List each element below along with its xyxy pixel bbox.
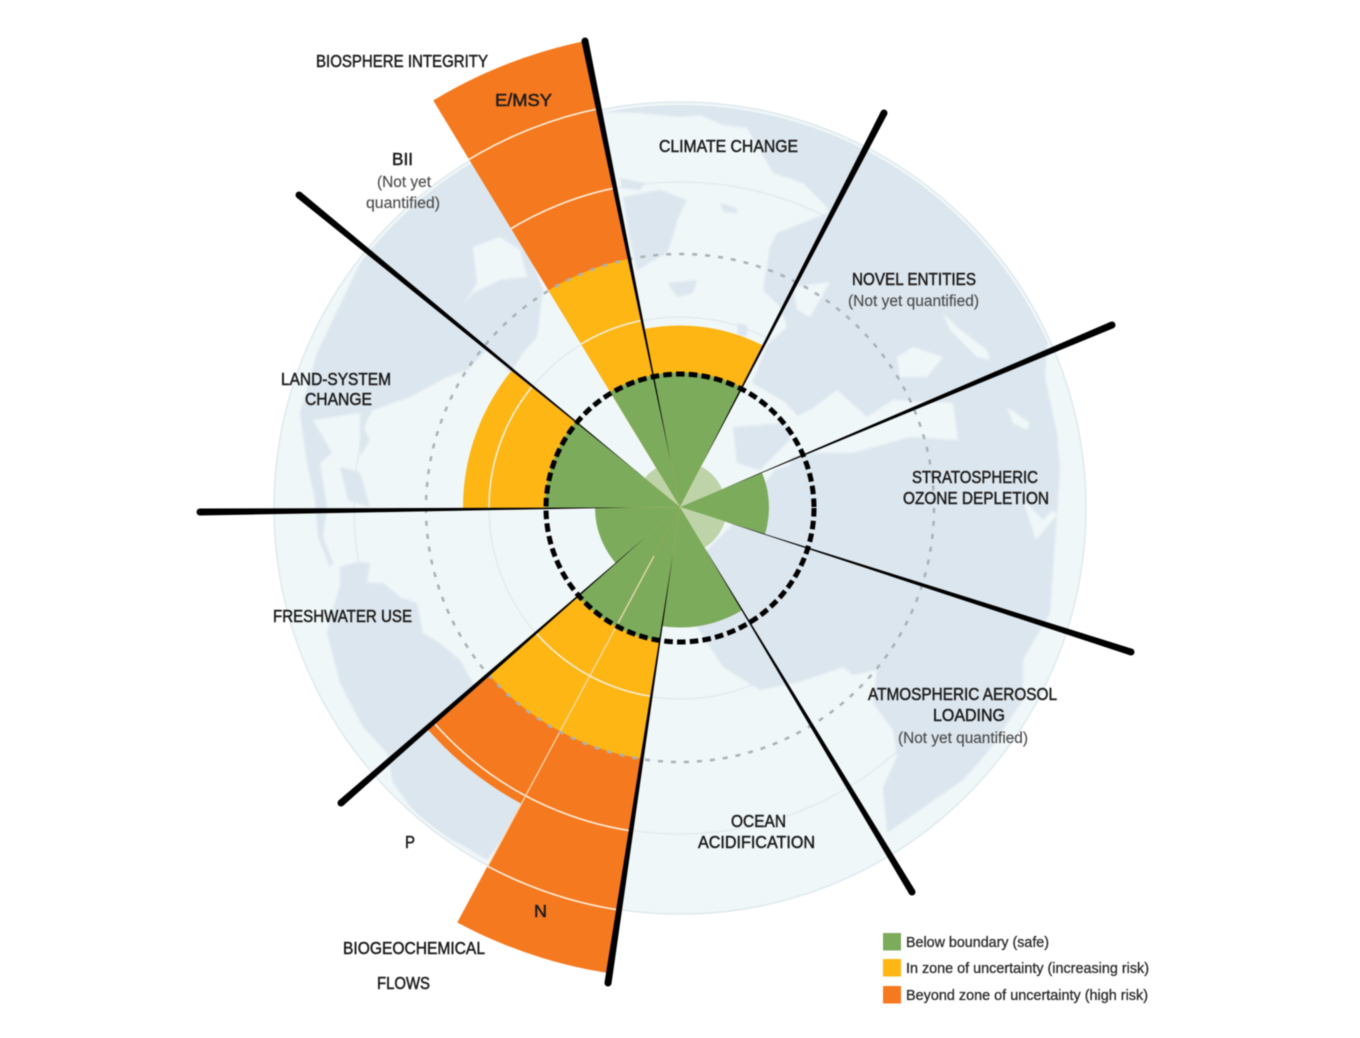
label: freshwater use: FRESHWATER USE xyxy=(273,606,412,626)
label: biosphere integrity: BIOSPHERE INTEGRITY xyxy=(316,51,488,71)
label: stratospheric ozone depletion xyxy=(903,467,1049,508)
spokes separating the boundaries xyxy=(196,38,1134,986)
label: biogeochemical flows: BIOGEOCHEMICAL xyxy=(343,938,485,958)
legend item: beyond zone of uncertainty: Beyond zone of uncertainty (high risk) xyxy=(906,988,1148,1004)
legend item: below boundary: Below boundary (safe) xyxy=(906,935,1049,951)
wedge: climate change xyxy=(644,324,763,507)
wedge: land-system change xyxy=(462,370,680,509)
legend item: zone of uncertainty: In zone of uncertainty (increasing risk) xyxy=(906,961,1149,977)
label: ocean acidification: OCEAN xyxy=(731,811,786,831)
wedge: atmospheric aerosol loading xyxy=(680,507,726,548)
globe background xyxy=(274,90,1110,914)
wedge: biosphere integrity E/MSY xyxy=(432,41,680,507)
wedge: ocean acidification xyxy=(662,507,742,628)
label: atmospheric aerosol loading: (Not yet quantified) xyxy=(898,730,1028,747)
label: novel entities: NOVEL ENTITIES xyxy=(852,269,976,289)
label: BII: quantified) xyxy=(366,195,440,212)
wedge: stratospheric ozone depletion xyxy=(680,472,770,534)
dashed circle: safe operating boundary xyxy=(546,374,814,642)
wedge: biogeochemical flows N xyxy=(456,507,680,974)
outer dotted ring: zone of uncertainty limit xyxy=(426,254,934,762)
label: climate change: CLIMATE CHANGE xyxy=(659,136,798,156)
wedge: biogeochemical flows P xyxy=(428,507,680,804)
label: atmospheric aerosol loading: LOADING xyxy=(933,705,1005,725)
label: BII: (Not yet xyxy=(377,174,432,191)
label: stratospheric ozone depletion: STRATOSPHERIC xyxy=(912,467,1038,487)
label: land-system change xyxy=(281,369,391,409)
label: P: P xyxy=(405,832,415,852)
label: atmospheric aerosol loading: ATMOSPHERIC AEROSOL xyxy=(868,684,1057,704)
label: stratospheric ozone depletion: OZONE DEPLETION xyxy=(903,488,1049,508)
label: ocean acidification: ACIDIFICATION xyxy=(698,832,815,852)
label: BII xyxy=(366,149,440,212)
label: biogeochemical flows xyxy=(343,938,485,993)
label: BII: BII xyxy=(392,149,413,169)
label: biogeochemical flows: FLOWS xyxy=(377,973,430,993)
label: ocean acidification xyxy=(698,811,815,852)
label: atmospheric aerosol loading xyxy=(868,684,1057,747)
divider between P and N xyxy=(488,556,654,866)
label: novel entities xyxy=(848,269,979,310)
wedge: novel entities xyxy=(680,466,722,507)
label: novel entities: (Not yet quantified) xyxy=(848,293,979,310)
label: E/MSY: E/MSY xyxy=(495,90,552,110)
label: land-system change: CHANGE xyxy=(305,389,372,409)
wedge: biosphere integrity BII xyxy=(644,468,679,506)
label: N: N xyxy=(534,901,547,921)
label: land-system change: LAND-SYSTEM xyxy=(281,369,391,389)
legend xyxy=(883,933,1149,1004)
wedge: freshwater use xyxy=(594,506,680,564)
map: continents xyxy=(300,90,1110,860)
